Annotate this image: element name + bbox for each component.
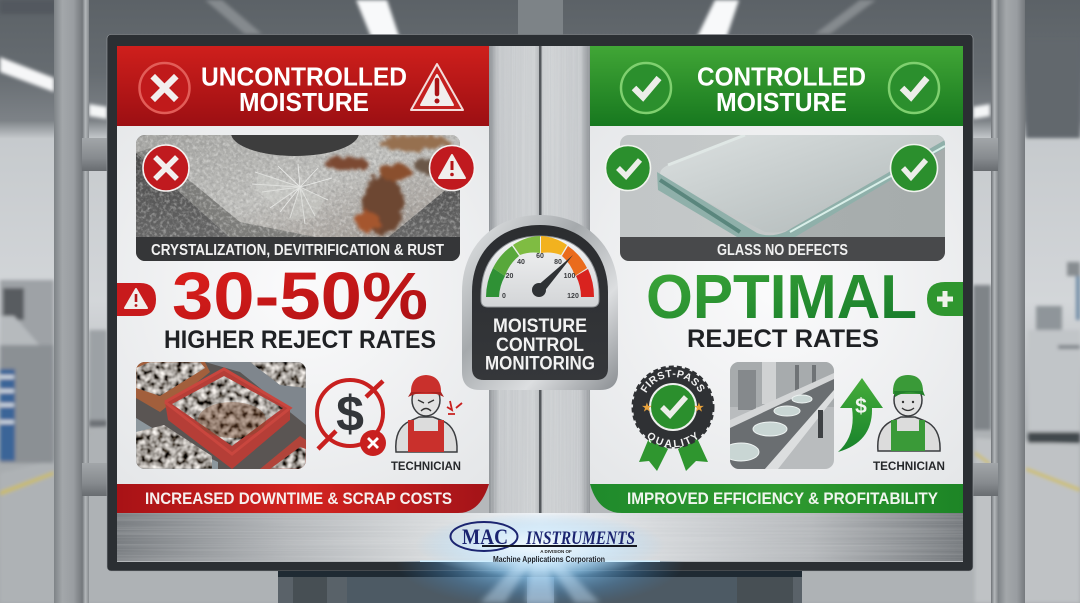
label: technician right: TECHNICIAN <box>873 461 945 473</box>
caption: glass no defects: GLASS NO DEFECTS <box>717 242 848 259</box>
stat label: higher reject rates: HIGHER REJECT RATES <box>164 326 436 354</box>
icon: red x circle <box>140 63 190 113</box>
banner: increased downtime <box>117 484 489 513</box>
gauge colour scale <box>486 236 594 297</box>
gauge label: CONTROL <box>496 335 584 356</box>
display frame <box>107 34 973 571</box>
gauge label: MONITORING <box>485 354 595 374</box>
logo: MAC Instruments: Machine Applications Corporation <box>493 554 605 564</box>
icon: profit arrow: $ <box>855 395 867 418</box>
icon: profit arrow <box>838 378 883 452</box>
banner: improved efficiency <box>590 484 963 513</box>
gauge scale numbers: 100 <box>564 273 575 280</box>
heading text: controlled moisture: MOISTURE <box>716 87 847 117</box>
moisture gauge <box>462 215 618 390</box>
icon: warning triangle <box>411 64 463 110</box>
icon: photo check right <box>890 144 938 192</box>
photo: bins of scrap parts <box>136 362 306 469</box>
icon: frustrated technician <box>396 375 462 452</box>
heading text: uncontrolled moisture: UNCONTROLLED <box>201 62 407 92</box>
bottom metal plate <box>117 513 963 577</box>
panel: uncontrolled moisture <box>117 46 489 513</box>
gauge scale numbers: 60 <box>536 253 544 260</box>
crystal starburst <box>252 164 332 224</box>
photo: defect-free glass <box>620 135 945 261</box>
gauge scale numbers <box>502 253 579 300</box>
gauge label: MOISTURE <box>493 316 587 337</box>
stat label: reject rates: REJECT RATES <box>687 325 879 353</box>
logo: MAC Instruments: A DIVISION OF <box>540 549 572 554</box>
banner: improved efficiency: IMPROVED EFFICIENCY & PROFITABILITY <box>627 490 938 508</box>
logo: MAC Instruments: INSTRUMENTS <box>525 528 635 549</box>
logo: MAC Instruments: MAC <box>462 524 508 549</box>
heading band: uncontrolled <box>117 46 489 126</box>
gauge scale numbers: 20 <box>506 273 513 280</box>
label: technician: TECHNICIAN <box>391 461 461 473</box>
badge: first-pass quality: FIRST-PASS <box>640 370 705 393</box>
caption: crystalization: CRYSTALIZATION, DEVITRIFICATION & RUST <box>151 242 444 259</box>
icon: crossed-out dollar <box>317 380 386 456</box>
gauge scale numbers: 80 <box>554 259 562 266</box>
panel: controlled moisture <box>590 46 963 513</box>
photo: crystallized and rusted metal <box>136 135 460 261</box>
gauge needle <box>532 255 573 297</box>
badge: first-pass quality: ★ <box>642 402 652 414</box>
badge: first-pass quality: ★ <box>694 402 704 414</box>
gauge scale numbers: 40 <box>517 259 525 266</box>
bottom glow rays <box>278 513 802 603</box>
badge: first-pass quality: QUALITY <box>648 432 698 448</box>
photo: conveyor line <box>723 362 834 469</box>
gauge face <box>481 236 599 307</box>
banner: increased downtime: INCREASED DOWNTIME & SCRAP COSTS <box>145 490 452 508</box>
icon: happy technician <box>878 375 940 451</box>
icon: crossed-out dollar: $ <box>336 386 364 442</box>
icon: green check left <box>621 63 671 113</box>
heading band: controlled <box>590 46 963 126</box>
gauge scale numbers: 120 <box>567 293 579 300</box>
icon: photo warning badge <box>430 146 474 190</box>
icon: photo check left <box>606 146 650 190</box>
heading text: uncontrolled moisture: MOISTURE <box>239 87 369 117</box>
icon: photo x badge <box>143 145 189 191</box>
logo: MAC Instruments <box>450 522 637 564</box>
panel: center metal column <box>489 46 590 516</box>
badge: first-pass quality <box>632 366 714 471</box>
warning tab <box>117 283 156 316</box>
gauge scale numbers: 0 <box>502 293 506 300</box>
stat: optimal: OPTIMAL <box>646 263 917 332</box>
heading text: controlled moisture: CONTROLLED <box>697 62 866 92</box>
plus tab <box>927 282 963 316</box>
icon: green check right <box>889 63 939 113</box>
stat: 30-50%: 30-50% <box>172 259 428 334</box>
